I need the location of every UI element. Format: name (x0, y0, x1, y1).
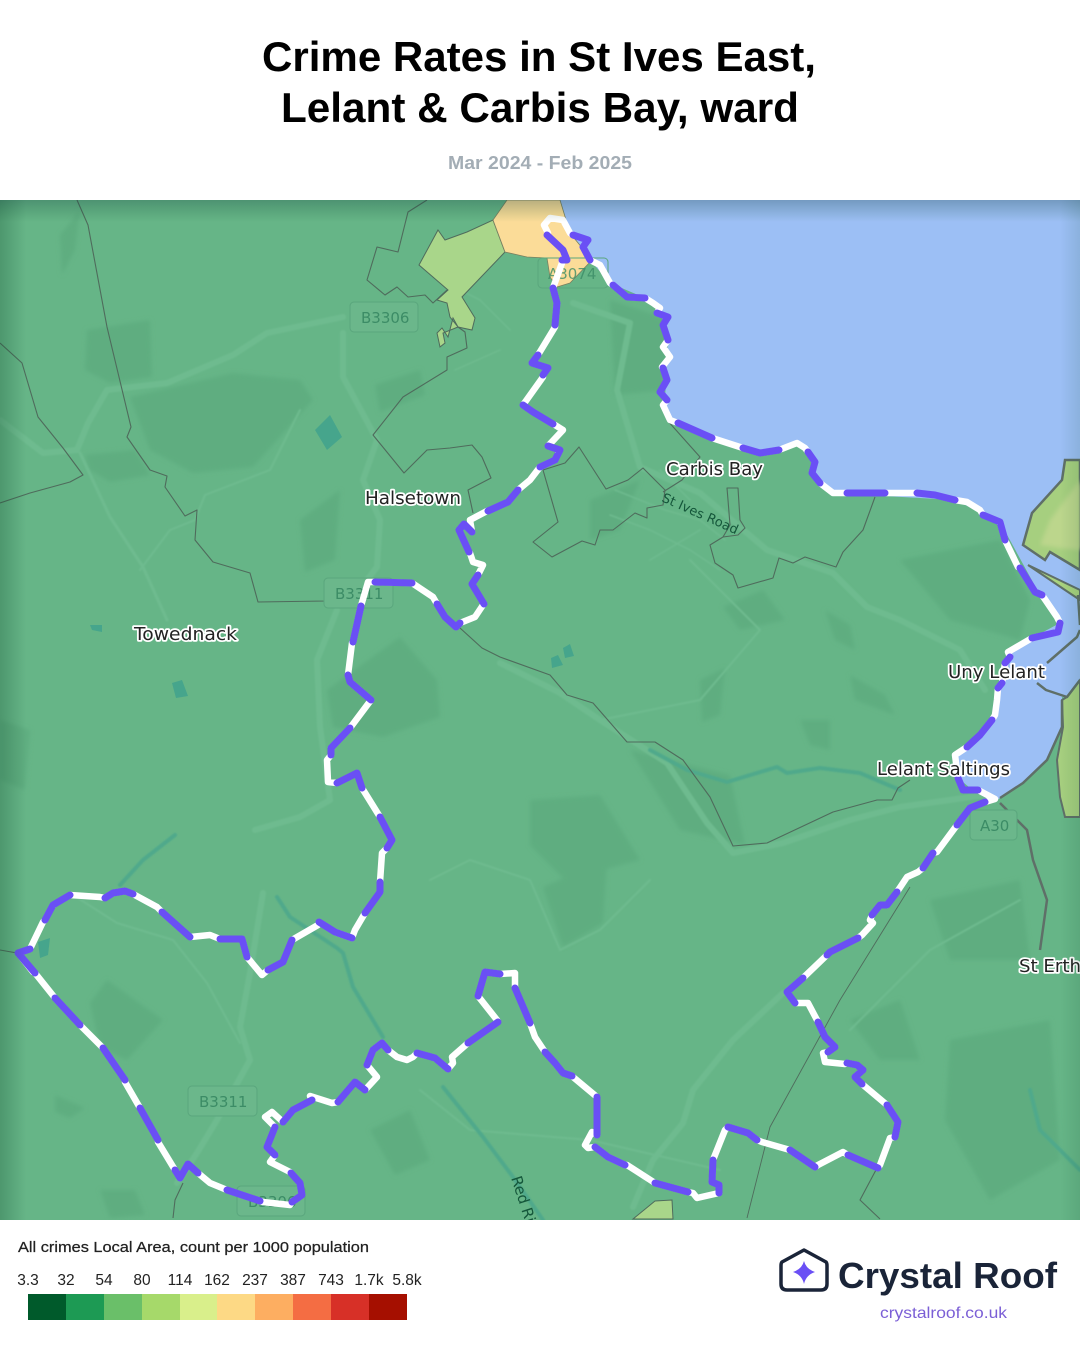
logo (781, 1250, 1058, 1322)
place label: Lelant Saltings: Lelant Saltings (877, 759, 1010, 780)
road shield: A30: A30 (980, 817, 1009, 835)
road label: St Ives Road: St Ives Road (659, 491, 740, 538)
map edge shading (0, 200, 1080, 1220)
road shield: A3074: A3074 (548, 265, 596, 283)
south-east shore land (1057, 680, 1080, 817)
legend scale values: 387 (280, 1272, 306, 1289)
title: Lelant & Carbis Bay, ward (281, 84, 799, 131)
road shield: B3306 south: B3306 (248, 1193, 296, 1211)
place label: St Erth: St Erth (1019, 956, 1080, 977)
title: Crime Rates in St Ives East, (262, 33, 816, 80)
ward boundary (18, 218, 1060, 1205)
road shield: B3306: B3306 (361, 309, 409, 327)
legend colour bar (28, 1294, 407, 1320)
road shield: B3311 north: B3311 (335, 585, 383, 603)
legend scale values: 3.3 (17, 1272, 39, 1289)
southern pale green area (633, 1200, 673, 1219)
legend scale values: 54 (95, 1272, 113, 1289)
low crime area, pale green (419, 220, 505, 347)
rivers (120, 750, 1080, 1220)
road shield: A30 (970, 810, 1017, 840)
road shield: B3311 south: B3311 (199, 1093, 247, 1111)
sea and estuary (560, 200, 1080, 800)
legend scale values: 80 (133, 1272, 151, 1289)
legend scale values: 114 (168, 1272, 193, 1289)
place label: Carbis Bay: Carbis Bay (666, 459, 763, 480)
headland, far shore (1023, 460, 1080, 570)
place label: Halsetown: Halsetown (365, 488, 461, 509)
website url: crystalroof.co.uk (880, 1305, 1008, 1322)
sand spit (1028, 565, 1080, 600)
legend scale values: 162 (204, 1272, 230, 1289)
road shield: B3306 (350, 302, 418, 332)
railway line (1000, 803, 1047, 950)
place label: Towednack: Towednack (133, 624, 238, 645)
map panel (0, 200, 1080, 1249)
legend scale values: 5.8k (392, 1272, 422, 1289)
legend title: All crimes Local Area, count per 1000 population (18, 1239, 369, 1256)
legend scale values: 743 (318, 1272, 344, 1289)
river label: Red River: Red River (507, 1174, 547, 1249)
legend (17, 1239, 422, 1320)
legend scale values (17, 1272, 422, 1289)
St Ives centre, yellow area (493, 200, 592, 287)
place label: Uny Lelant: Uny Lelant (948, 662, 1045, 683)
legend scale values: 32 (57, 1272, 75, 1289)
road shield: B3311 north (324, 578, 393, 608)
road shield: A3074 (538, 258, 608, 288)
headland highlight (1040, 480, 1080, 550)
boundary purple dashes (18, 235, 1060, 1202)
estuary channel lines (1000, 595, 1080, 798)
wordmark: Crystal Roof (838, 1255, 1058, 1296)
legend scale values: 237 (242, 1272, 268, 1289)
area boundaries (0, 200, 910, 1219)
road shield: B3306 south (237, 1186, 305, 1216)
subtitle: date range: Mar 2024 - Feb 2025 (448, 153, 632, 173)
roads (0, 280, 1020, 1207)
legend scale values: 1.7k (354, 1272, 384, 1289)
road shield: B3311 south (188, 1086, 257, 1116)
boundary white line (18, 218, 1060, 1205)
icon: house with star (781, 1250, 827, 1290)
title (262, 33, 816, 131)
ponds (38, 415, 574, 958)
forest patches (59, 502, 594, 1110)
